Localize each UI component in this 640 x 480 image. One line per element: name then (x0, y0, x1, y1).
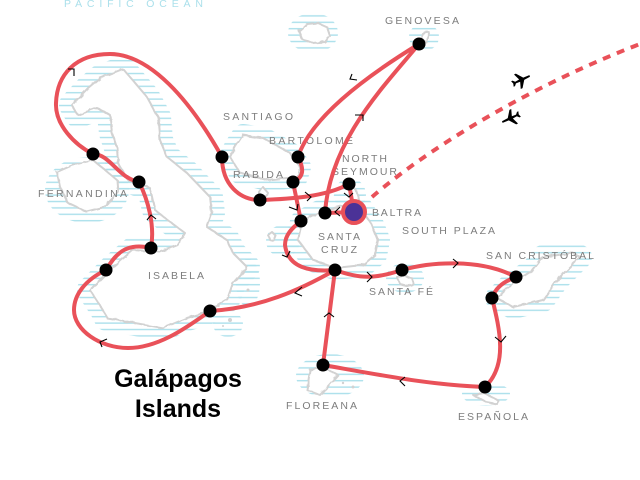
stop markers (86, 38, 522, 394)
label: Santa Fé: SANTA FÉ (369, 285, 433, 298)
island: Fernandina (57, 160, 118, 212)
island: Baltra (350, 184, 361, 206)
island: Santiago (230, 135, 300, 180)
direction arrows (68, 69, 506, 386)
label: Bartolome: BARTOLOME (269, 135, 353, 147)
island: San Cristóbal (497, 253, 580, 307)
island: Pinzon (268, 232, 276, 241)
island: Genovesa (421, 31, 429, 42)
island: Española (473, 393, 498, 404)
island: Marchena (299, 23, 330, 43)
icon: plane arriving (509, 69, 533, 91)
island: Rabida (259, 187, 268, 197)
label: Española: ESPAÑOLA (458, 410, 528, 423)
island: Santa Cruz (298, 205, 378, 268)
label: North Seymour: SEYMOUR (332, 166, 397, 178)
label: Santa Cruz: SANTA (318, 231, 360, 243)
cruise route (56, 44, 516, 387)
icon: plane departing (499, 107, 523, 129)
label: Genovesa: GENOVESA (385, 15, 459, 27)
flight path dashed (372, 44, 640, 197)
start marker: Baltra (343, 201, 365, 223)
ocean hatching (45, 13, 580, 406)
island: Santa Fé (397, 276, 414, 286)
label: Fernandina: FERNANDINA (38, 188, 127, 200)
label: Baltra: BALTRA (372, 207, 421, 219)
label: Floreana: FLOREANA (286, 400, 357, 412)
label: Isabela: ISABELA (148, 270, 204, 282)
label: Santa Cruz: CRUZ (321, 244, 358, 256)
title: Islands (135, 395, 221, 423)
label: North Seymour: NORTH (342, 153, 387, 165)
small islets (222, 288, 354, 388)
label: Rabida: RABIDA (233, 169, 283, 181)
island: Isabela (72, 69, 247, 328)
label: South Plaza: SOUTH PLAZA (402, 225, 495, 237)
title: Galápagos (114, 365, 242, 393)
label: Santiago: SANTIAGO (223, 111, 293, 123)
label: San Cristóbal: SAN CRISTÓBAL (486, 249, 594, 262)
island: Floreana (307, 367, 338, 395)
